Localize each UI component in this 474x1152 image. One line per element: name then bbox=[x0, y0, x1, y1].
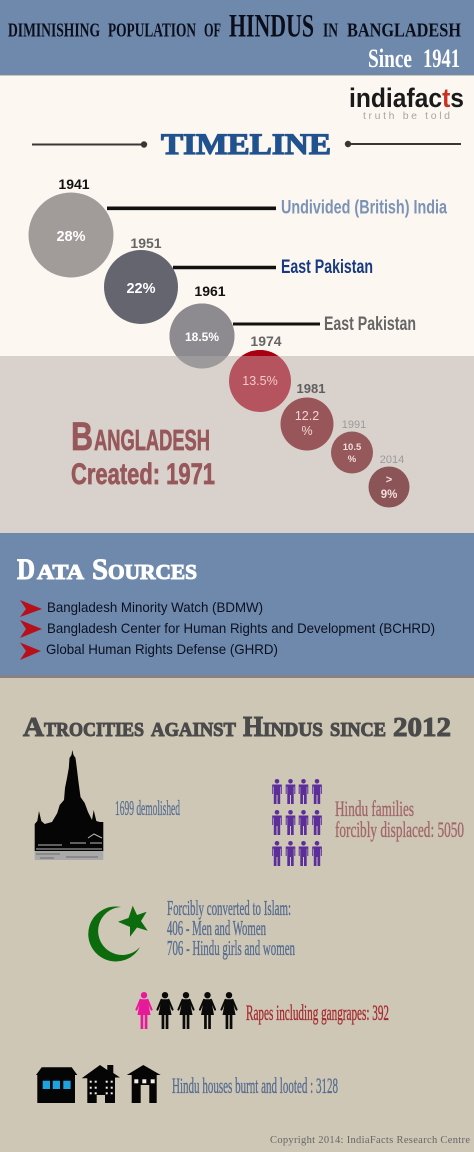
heading: data sources: S bbox=[92, 553, 108, 586]
icon: women bbox=[136, 992, 237, 1029]
list of sources: Bangladesh Center for Human Rights and Development (BCHRD) bbox=[47, 620, 435, 636]
heading: atrocities: A bbox=[23, 712, 45, 742]
timeline: 1961: East Pakistan bbox=[324, 313, 416, 335]
heading: Bangladesh created 1971: B bbox=[71, 415, 93, 459]
text: families displaced: Hindu families bbox=[335, 796, 414, 821]
text: forced conversions bbox=[167, 896, 295, 960]
logo: indiafacts: truth be told bbox=[363, 110, 450, 122]
timeline: 1961 bbox=[170, 283, 416, 368]
timeline: 1941: 28% bbox=[56, 229, 86, 245]
header band bbox=[0, 0, 474, 75]
text: families displaced bbox=[335, 796, 464, 842]
subtitle: Since bbox=[368, 44, 412, 73]
icon: crescent and star bbox=[88, 906, 148, 961]
text: 1699 demolished bbox=[115, 796, 180, 820]
timeline: 1951 bbox=[104, 235, 373, 324]
heading: timeline: TIMELINE bbox=[161, 128, 331, 161]
timeline: 1991: % bbox=[348, 454, 357, 465]
heading: Bangladesh created 1971 bbox=[71, 415, 215, 491]
timeline: 1981: 12.2 bbox=[295, 409, 319, 423]
text: forced conversions: 706 - Hindu girls and women bbox=[167, 936, 295, 960]
timeline: 1981 bbox=[280, 381, 334, 450]
panel: data sources bbox=[0, 533, 474, 678]
heading: data sources bbox=[17, 553, 197, 586]
timeline: 1961: 18.5% bbox=[185, 330, 219, 344]
timeline: 1981: % bbox=[301, 424, 313, 438]
icons: red arrows bbox=[20, 600, 42, 660]
icon: displaced families bbox=[272, 779, 322, 866]
timeline: 1961: 1961 bbox=[194, 283, 226, 299]
list of sources: Global Human Rights Defense (GHRD) bbox=[46, 641, 278, 657]
title: POPULATION bbox=[108, 20, 196, 42]
footer: copyright: Copyright 2014: IndiaFacts Research Centre bbox=[270, 1135, 470, 1146]
panel: atrocities background bbox=[0, 677, 474, 1152]
timeline: 1951: East Pakistan bbox=[281, 256, 373, 278]
heading: Bangladesh created 1971: ANGLADESH bbox=[94, 425, 210, 457]
panel: timeline background bbox=[0, 76, 474, 356]
subtitle: 1941 bbox=[423, 44, 460, 73]
title: IN bbox=[323, 20, 338, 42]
heading: timeline bbox=[32, 128, 461, 161]
timeline: 1991: 1991 bbox=[342, 419, 366, 431]
heading: atrocities bbox=[23, 712, 451, 743]
timeline: 1981: 1981 bbox=[297, 381, 325, 396]
text: forced conversions: 406 - Men and Women bbox=[167, 916, 266, 940]
title: DIMINISHING bbox=[8, 20, 100, 42]
logo: indiafacts: indiafacts bbox=[349, 83, 464, 113]
heading: atrocities: AGAINST bbox=[151, 719, 237, 741]
timeline: 1951: 1951 bbox=[130, 235, 162, 251]
heading: atrocities: 2012 bbox=[393, 712, 451, 742]
panel: Bangladesh era background bbox=[0, 356, 474, 533]
list of sources bbox=[46, 599, 435, 657]
timeline: 1974: 1974 bbox=[250, 333, 282, 349]
timeline: 1974 bbox=[229, 333, 291, 412]
heading: data sources: D bbox=[17, 553, 35, 586]
heading: Bangladesh created 1971: Created: 1971 bbox=[71, 458, 215, 491]
timeline: 2014 bbox=[368, 454, 410, 508]
timeline: 2014: 2014 bbox=[380, 454, 404, 466]
timeline: 1941 bbox=[28, 176, 447, 278]
text: forced conversions: Forcibly converted to Islam: bbox=[167, 896, 291, 920]
heading: data sources: ATA bbox=[37, 560, 85, 584]
icon: temple bbox=[35, 750, 103, 860]
heading: atrocities: SINCE bbox=[330, 719, 386, 741]
timeline: 1951: 22% bbox=[126, 281, 156, 297]
timeline: 1941: 1941 bbox=[58, 176, 90, 192]
timeline: 1991 bbox=[331, 419, 373, 474]
list of sources: Bangladesh Minority Watch (BDMW) bbox=[47, 599, 263, 615]
timeline: 1974: 13.5% bbox=[242, 374, 278, 388]
heading: data sources: OURCES bbox=[108, 560, 197, 584]
timeline: 1991: 10.5 bbox=[343, 442, 362, 453]
heading: atrocities: TROCITIES bbox=[44, 719, 144, 741]
subtitle bbox=[368, 44, 460, 73]
title: HINDUS bbox=[229, 8, 314, 44]
timeline: 2014: > bbox=[386, 474, 392, 486]
heading: atrocities: H bbox=[243, 712, 263, 743]
heading: atrocities: INDUS bbox=[263, 719, 323, 741]
title bbox=[8, 8, 461, 44]
title: OF bbox=[204, 20, 221, 42]
icon: houses bbox=[36, 1065, 161, 1103]
timeline: 2014: 9% bbox=[381, 489, 397, 501]
